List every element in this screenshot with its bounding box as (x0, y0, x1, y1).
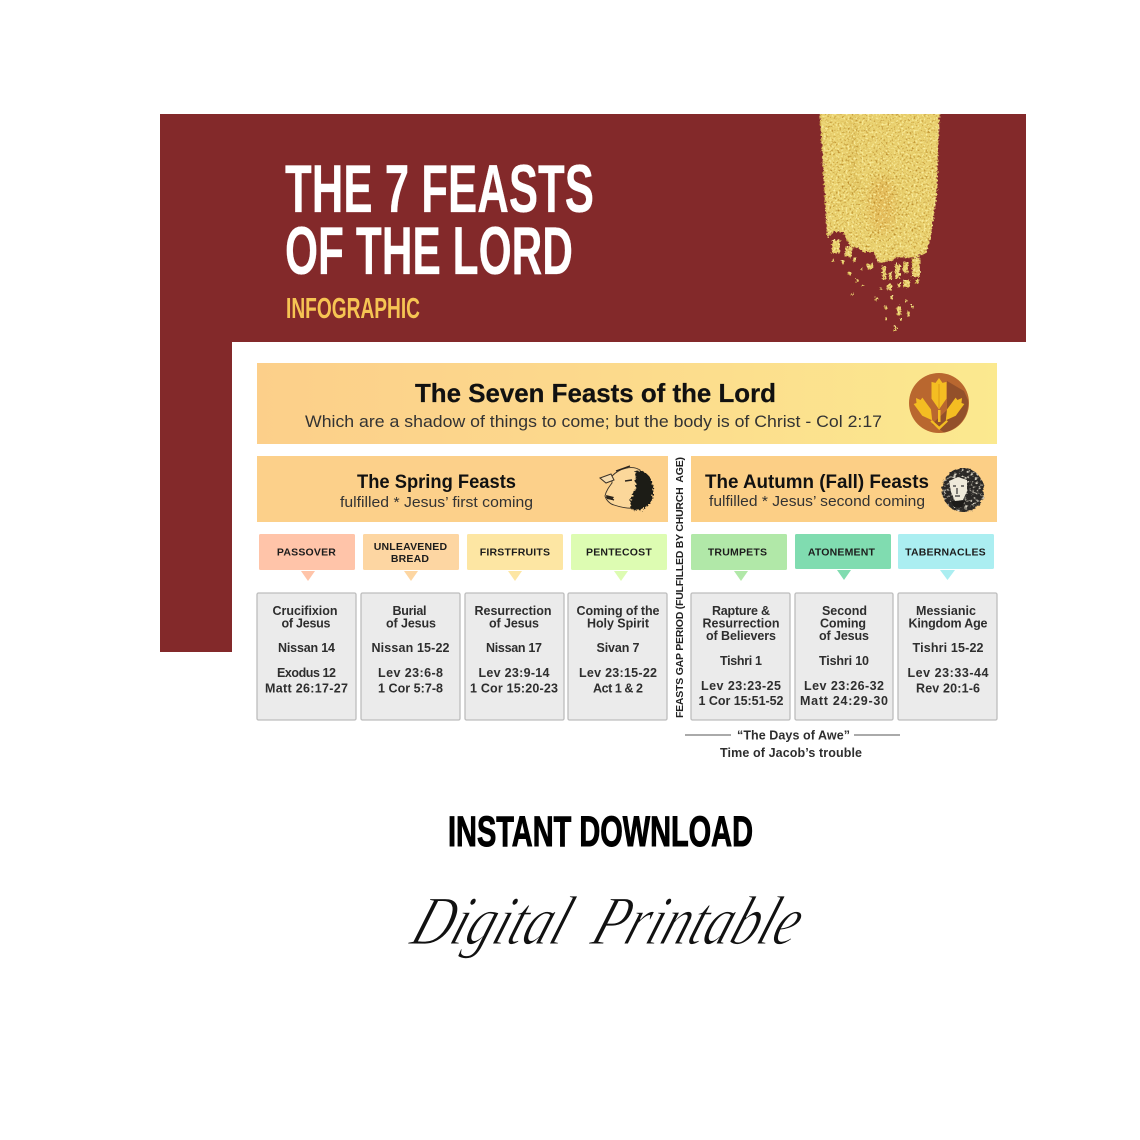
column: unleavened bread: of Jesus (386, 616, 436, 630)
title (285, 151, 594, 289)
column: tabernacles: Rev 20:1-6 (916, 682, 980, 696)
autumn subheading: fulfilled * Jesus’ second coming (709, 494, 925, 510)
column: tabernacles: Kingdom Age (908, 616, 988, 630)
column: firstfruits (465, 534, 564, 720)
column: passover: PASSOVER (277, 546, 336, 558)
column: trumpets: TRUMPETS (708, 546, 767, 558)
column: atonement: Second (822, 604, 867, 618)
note: the days of awe: Time of Jacob’s trouble (720, 746, 862, 760)
instant download heading: INSTANT DOWNLOAD (448, 808, 753, 856)
note: the days of awe (685, 728, 900, 760)
infographic canvas (160, 114, 1026, 958)
subtitle: infographic: INFOGRAPHIC (286, 293, 420, 325)
column: atonement: Matt 24:29-30 (800, 694, 888, 708)
column: pentecost (568, 534, 667, 720)
column: atonement (795, 534, 893, 720)
column: atonement: of Jesus (819, 629, 869, 643)
column: tabernacles: TABERNACLES (905, 546, 986, 558)
column: passover: Crucifixion (272, 604, 338, 618)
column: pentecost: Holy Spirit (587, 616, 650, 630)
column: atonement: ATONEMENT (808, 546, 876, 558)
column: atonement: Tishri 10 (819, 654, 869, 668)
banner subtitle: Which are a shadow of things to come; but the body is of Christ - Col 2:17 (305, 412, 882, 431)
column: unleavened bread: BREAD (391, 553, 429, 565)
column: unleavened bread (361, 534, 460, 720)
column: pentecost: Sivan 7 (596, 641, 640, 655)
column: atonement: Lev 23:26-32 (804, 679, 884, 693)
column: unleavened bread: Lev 23:6-8 (378, 666, 443, 680)
title: THE 7 FEASTS (285, 151, 594, 227)
column: passover: Matt 26:17-27 (265, 682, 348, 696)
column: pentecost: PENTECOST (586, 546, 652, 558)
icon: wheat badge (909, 373, 969, 433)
column: firstfruits: Lev 23:9-14 (478, 666, 550, 680)
column: firstfruits: 1 Cor 15:20-23 (470, 682, 558, 696)
column: trumpets (691, 534, 790, 720)
column: unleavened bread: 1 Cor 5:7-8 (378, 682, 443, 696)
autumn heading: The Autumn (Fall) Feasts (705, 472, 929, 493)
title: OF THE LORD (285, 213, 573, 289)
column: firstfruits: Resurrection (474, 604, 552, 618)
column: pentecost: Act 1 & 2 (593, 682, 643, 696)
column: pentecost: Lev 23:15-22 (579, 666, 657, 680)
column: tabernacles: Tishri 15-22 (912, 641, 984, 655)
column: firstfruits: Nissan 17 (486, 641, 542, 655)
column: passover: Exodus 12 (277, 666, 336, 680)
column: tabernacles: Messianic (916, 604, 976, 618)
spring subheading: fulfilled * Jesus’ first coming (340, 495, 533, 511)
column: tabernacles (898, 534, 997, 720)
banner: the seven feasts of the lord (257, 363, 997, 444)
column: atonement: Coming (820, 616, 866, 630)
icon: lion head (942, 468, 984, 512)
column: trumpets: Lev 23:23-25 (701, 679, 781, 693)
column: unleavened bread: Nissan 15-22 (372, 641, 450, 655)
icon: lamb head (600, 466, 653, 510)
column: trumpets: Rapture & (712, 604, 770, 618)
gold brush stroke (819, 106, 940, 331)
column: trumpets: Resurrection (702, 616, 780, 630)
column: trumpets: of Believers (706, 629, 776, 643)
note: the days of awe: “The Days of Awe” (737, 728, 850, 742)
column: trumpets: Tishri 1 (720, 654, 762, 668)
column: pentecost: Coming of the (576, 604, 660, 618)
column: firstfruits: of Jesus (489, 616, 539, 630)
column: firstfruits: FIRSTFRUITS (480, 546, 550, 558)
header band (160, 114, 1026, 652)
column: tabernacles: Lev 23:33-44 (908, 666, 989, 680)
column: passover (257, 534, 356, 720)
column: unleavened bread: UNLEAVENED (374, 541, 447, 553)
digital printable script line: Digital Printable (402, 882, 816, 959)
banner title: The Seven Feasts of the Lord (415, 378, 776, 408)
panel: autumn feasts banner (691, 456, 997, 522)
column: passover: Nissan 14 (278, 641, 335, 655)
vertical label: feasts gap period: FEASTS GAP PERIOD (FULFILLED BY CHURCH AGE) (674, 457, 686, 718)
panel: spring feasts banner (257, 456, 668, 522)
column: passover: of Jesus (282, 616, 331, 630)
spring heading: The Spring Feasts (357, 472, 516, 493)
column: trumpets: 1 Cor 15:51-52 (698, 694, 784, 708)
column: unleavened bread: Burial (392, 604, 426, 618)
